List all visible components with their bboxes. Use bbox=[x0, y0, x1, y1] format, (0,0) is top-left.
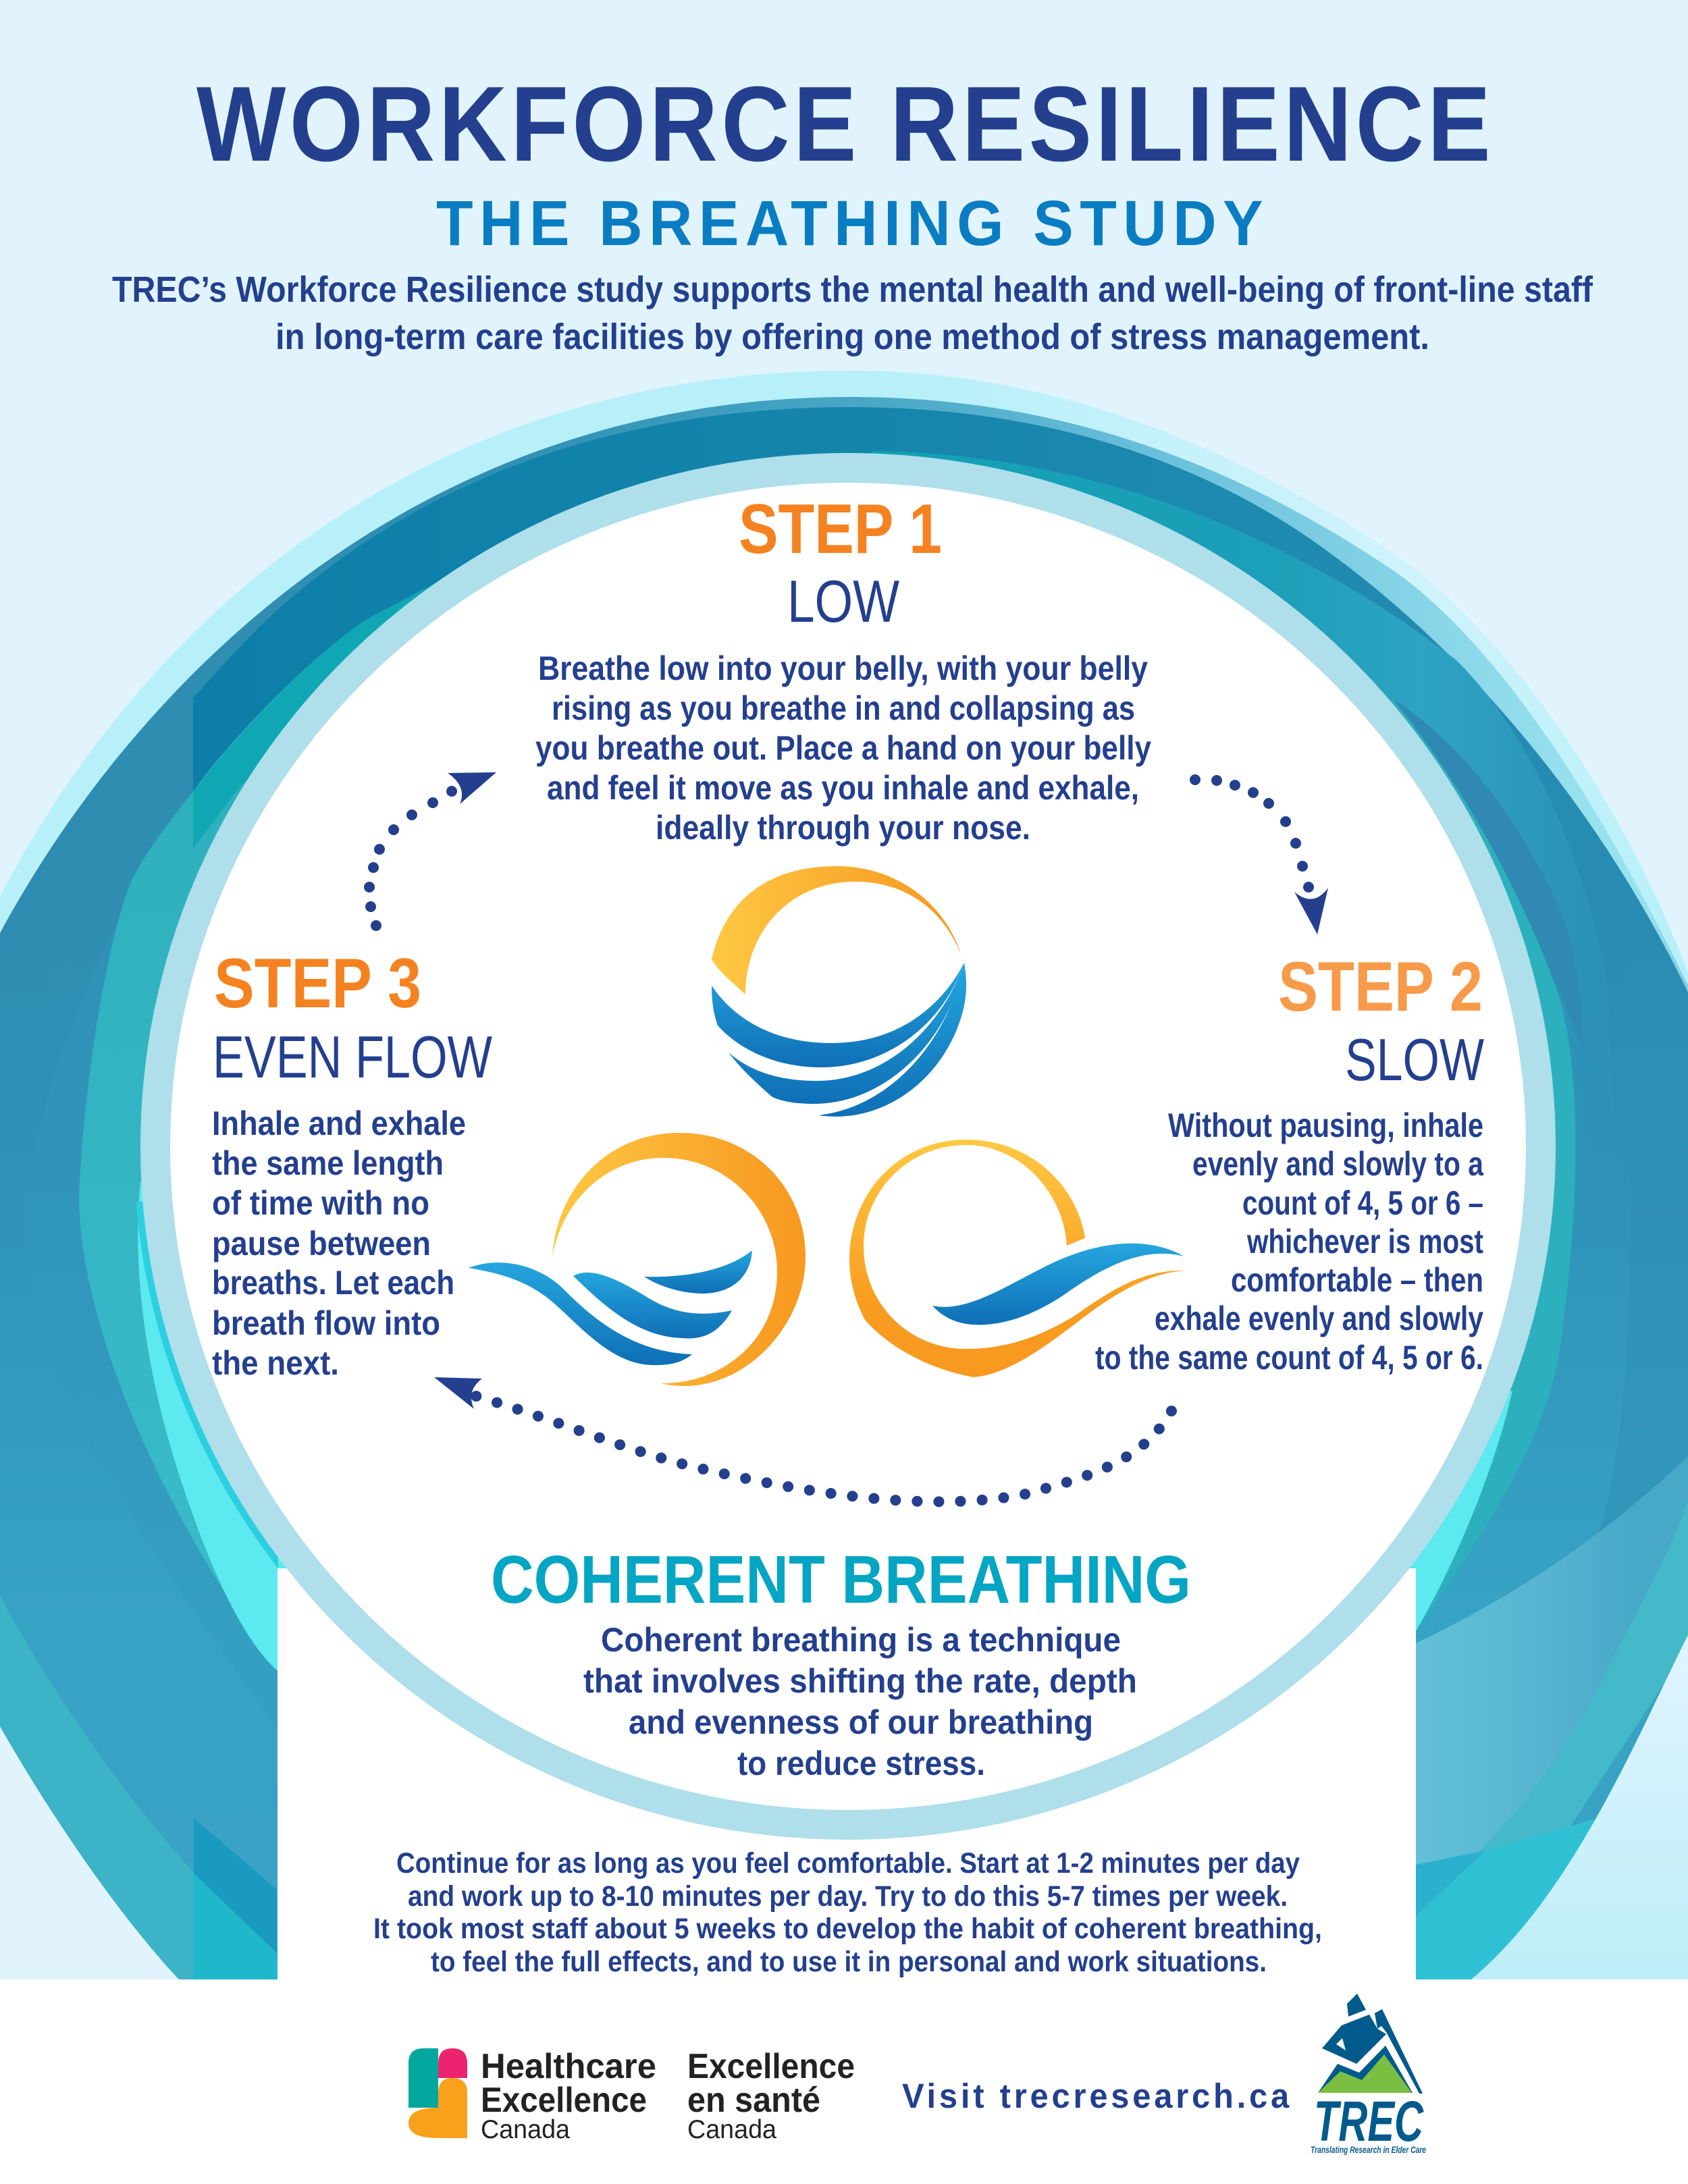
coherent breathing text: and evenness of our breathing bbox=[629, 1703, 1093, 1741]
step 3 block bbox=[212, 944, 492, 1382]
step 3 text bbox=[212, 1104, 466, 1382]
step 3 label: EVEN FLOW bbox=[213, 1023, 492, 1090]
arrow: step 3 to step 1 bbox=[364, 772, 496, 931]
step 2 text: evenly and slowly to a bbox=[1192, 1145, 1484, 1183]
icon: even flow waves bbox=[469, 1133, 806, 1386]
step 1 text: rising as you breathe in and collapsing as bbox=[552, 689, 1135, 727]
step 2 text: Without pausing, inhale bbox=[1168, 1107, 1483, 1144]
practice guidance text: Continue for as long as you feel comfortable. Start at 1-2 minutes per day bbox=[396, 1847, 1300, 1880]
practice guidance text bbox=[373, 1847, 1322, 1978]
logo: TREC bbox=[1311, 1994, 1426, 2155]
logo: TREC: Translating Research in Elder Care bbox=[1311, 2145, 1426, 2155]
intro text: in long-term care facilities by offering one method of stress management. bbox=[275, 317, 1429, 357]
step 1 text: ideally through your nose. bbox=[656, 809, 1030, 847]
step 1 block bbox=[535, 490, 1151, 847]
logo text french: en santé bbox=[687, 2081, 820, 2120]
step 3 text: Inhale and exhale bbox=[212, 1104, 466, 1142]
logo text english: Canada bbox=[481, 2115, 570, 2144]
logo: Healthcare Excellence Canada bbox=[408, 2047, 855, 2144]
logo: TREC: TREC bbox=[1314, 2089, 1424, 2153]
step 3 text: of time with no bbox=[212, 1184, 429, 1222]
intro text bbox=[112, 269, 1593, 357]
step 1 label: LOW bbox=[787, 568, 899, 635]
logo text english: Excellence bbox=[481, 2081, 647, 2120]
subtitle: THE BREATHING STUDY bbox=[436, 188, 1269, 259]
practice guidance text: and work up to 8-10 minutes per day. Try to do this 5-7 times per week. bbox=[408, 1880, 1288, 1913]
step 3 text: breaths. Let each bbox=[212, 1264, 454, 1302]
step 1 heading: STEP 1 bbox=[739, 490, 942, 568]
step 3 text: the next. bbox=[212, 1344, 339, 1382]
coherent breathing text bbox=[583, 1621, 1137, 1782]
step 2 text bbox=[1095, 1107, 1484, 1377]
coherent breathing text: that involves shifting the rate, depth bbox=[583, 1662, 1137, 1700]
icon: low breath sphere bbox=[712, 866, 966, 1117]
icon: slow wave bbox=[849, 1140, 1186, 1377]
step 2 text: comfortable – then bbox=[1231, 1261, 1483, 1299]
step 2 text: count of 4, 5 or 6 – bbox=[1242, 1184, 1483, 1222]
step 3 heading: STEP 3 bbox=[214, 944, 421, 1023]
step 1 text: and feel it move as you inhale and exhale, bbox=[547, 769, 1139, 807]
step 2 text: to the same count of 4, 5 or 6. bbox=[1095, 1339, 1483, 1377]
step 3 text: pause between bbox=[212, 1225, 431, 1262]
coherent breathing heading: COHERENT BREATHING bbox=[491, 1542, 1191, 1618]
background arches bbox=[0, 371, 1688, 1981]
logo text english bbox=[481, 2047, 656, 2144]
step 3 text: the same length bbox=[212, 1144, 444, 1182]
logo text french: Canada bbox=[687, 2115, 776, 2144]
practice guidance text: to feel the full effects, and to use it in personal and work situations. bbox=[431, 1946, 1267, 1978]
logo text english: Healthcare bbox=[481, 2047, 656, 2086]
coherent breathing text: Coherent breathing is a technique bbox=[601, 1621, 1121, 1659]
step 2 block bbox=[1095, 948, 1484, 1377]
step 2 label: SLOW bbox=[1345, 1026, 1484, 1093]
practice guidance text: It took most staff about 5 weeks to develop the habit of coherent breathing, bbox=[373, 1913, 1322, 1945]
central white circle bbox=[170, 483, 1526, 1810]
arrow: step 1 to step 2 bbox=[1190, 774, 1328, 934]
arrow: step 2 to step 3 bbox=[434, 1377, 1171, 1501]
step 1 text: you breathe out. Place a hand on your belly bbox=[535, 729, 1151, 767]
title: WORKFORCE RESILIENCE bbox=[196, 65, 1494, 184]
step 2 text: exhale evenly and slowly bbox=[1155, 1300, 1483, 1337]
step 2 text: whichever is most bbox=[1246, 1223, 1483, 1260]
white lower panel bbox=[278, 1568, 1416, 1980]
logo text french bbox=[687, 2047, 855, 2144]
step 2 heading: STEP 2 bbox=[1278, 948, 1483, 1026]
logo mark bbox=[408, 2048, 467, 2138]
step 3 text: breath flow into bbox=[212, 1304, 440, 1342]
website link text: Visit trecresearch.ca bbox=[902, 2077, 1292, 2115]
logo text french: Excellence bbox=[687, 2047, 855, 2086]
coherent breathing text: to reduce stress. bbox=[737, 1744, 985, 1782]
step 1 text: Breathe low into your belly, with your belly bbox=[538, 649, 1148, 687]
footer band bbox=[0, 1979, 1688, 2184]
central circle ring bbox=[140, 453, 1556, 1840]
step 1 text bbox=[535, 649, 1151, 847]
